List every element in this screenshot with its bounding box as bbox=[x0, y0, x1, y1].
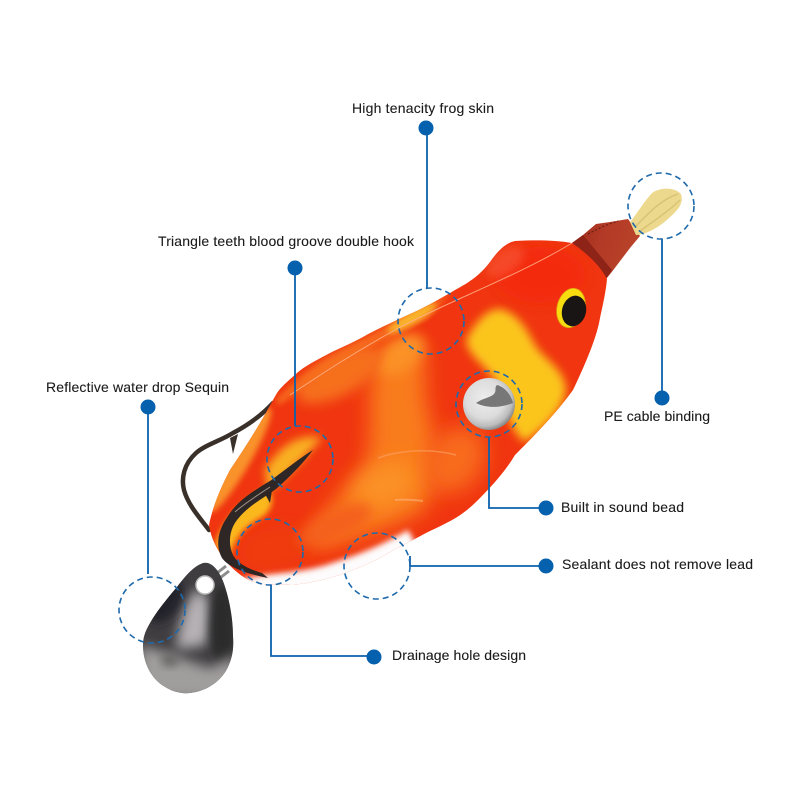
sound bead bbox=[463, 378, 515, 430]
callout: Sealant does not remove lead bbox=[344, 533, 753, 599]
seam bbox=[290, 243, 572, 395]
callout: Built in sound bead bbox=[456, 371, 684, 516]
front hook bbox=[218, 450, 313, 578]
frog neck bbox=[572, 219, 640, 279]
yellow head patch bbox=[466, 309, 566, 442]
callout: Sealant does not remove lead: Sealant does not remove lead bbox=[562, 556, 753, 572]
callout: Drainage hole design bbox=[237, 519, 526, 664]
rear hook bbox=[183, 403, 273, 530]
callout: Triangle teeth blood groove double hook: Triangle teeth blood groove double hook bbox=[158, 233, 415, 249]
yellow tail patches bbox=[265, 437, 322, 492]
callout: Reflective water drop Sequin bbox=[46, 379, 229, 643]
orange centre band bbox=[305, 343, 436, 550]
spinner ring bbox=[207, 566, 229, 585]
callout: High tenacity frog skin bbox=[352, 100, 494, 354]
orange back strip bbox=[275, 292, 452, 405]
frog body bbox=[209, 240, 607, 585]
sequin blade bbox=[143, 562, 234, 694]
callout: Drainage hole design: Drainage hole design bbox=[392, 647, 526, 663]
eye bbox=[553, 285, 589, 331]
callout: PE cable binding: PE cable binding bbox=[604, 408, 710, 424]
callout: High tenacity frog skin: High tenacity frog skin bbox=[352, 100, 494, 116]
PE thread tail bbox=[630, 189, 682, 235]
product: frog lure bbox=[140, 189, 682, 700]
white belly bbox=[241, 526, 418, 585]
callout: PE cable binding bbox=[604, 173, 710, 424]
callout: Built in sound bead: Built in sound bead bbox=[561, 499, 684, 515]
red head bbox=[500, 250, 582, 300]
callout: Triangle teeth blood groove double hook bbox=[158, 233, 415, 492]
callout: Reflective water drop Sequin: Reflective water drop Sequin bbox=[46, 379, 229, 395]
shine streaks bbox=[378, 451, 456, 458]
